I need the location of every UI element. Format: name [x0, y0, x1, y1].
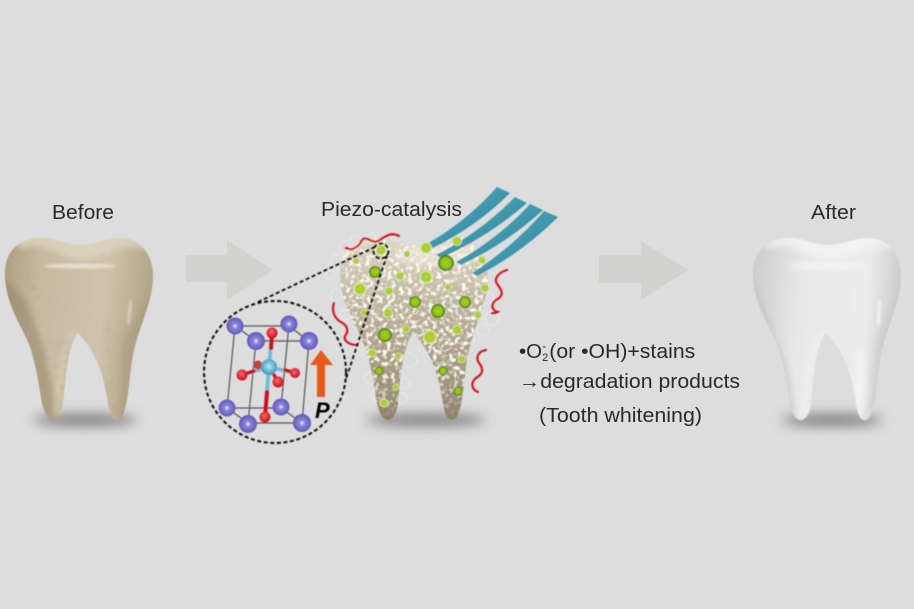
arrow: piezo-catalysis to after: [599, 241, 688, 300]
catalyst particles: [352, 236, 490, 408]
reaction text: [519, 339, 740, 427]
tooth: stained tooth before treatment: [0, 232, 155, 426]
zoom leader lines: [204, 244, 388, 443]
inset: crystal lattice magnifier: [204, 244, 388, 443]
label: After: After: [811, 201, 856, 224]
lattice edges: [227, 324, 309, 424]
label: Before: Before: [52, 201, 114, 224]
reaction text: •O: [519, 340, 542, 363]
atoms: [218, 316, 318, 433]
label: Piezo-catalysis: Piezo-catalysis: [321, 198, 462, 221]
reaction text: →degradation products: [519, 370, 740, 393]
reaction text: -: [542, 339, 546, 353]
arrow: before to piezo-catalysis: [186, 240, 273, 300]
foam bubbles around edge: [325, 233, 499, 403]
reaction text: (or •OH)+stains: [549, 340, 695, 363]
reaction text: (Tooth whitening): [539, 404, 702, 427]
polarization arrow: [310, 350, 333, 397]
brush bristles: [425, 187, 558, 276]
tooth: whitened tooth after treatment: [748, 232, 901, 426]
polarization label: P: [315, 398, 330, 423]
reaction text: 2: [542, 352, 548, 364]
vibration waves: [333, 234, 507, 392]
bonds: [242, 333, 295, 417]
tooth: tooth with piezo-catalyst particles and brush: [325, 187, 558, 426]
